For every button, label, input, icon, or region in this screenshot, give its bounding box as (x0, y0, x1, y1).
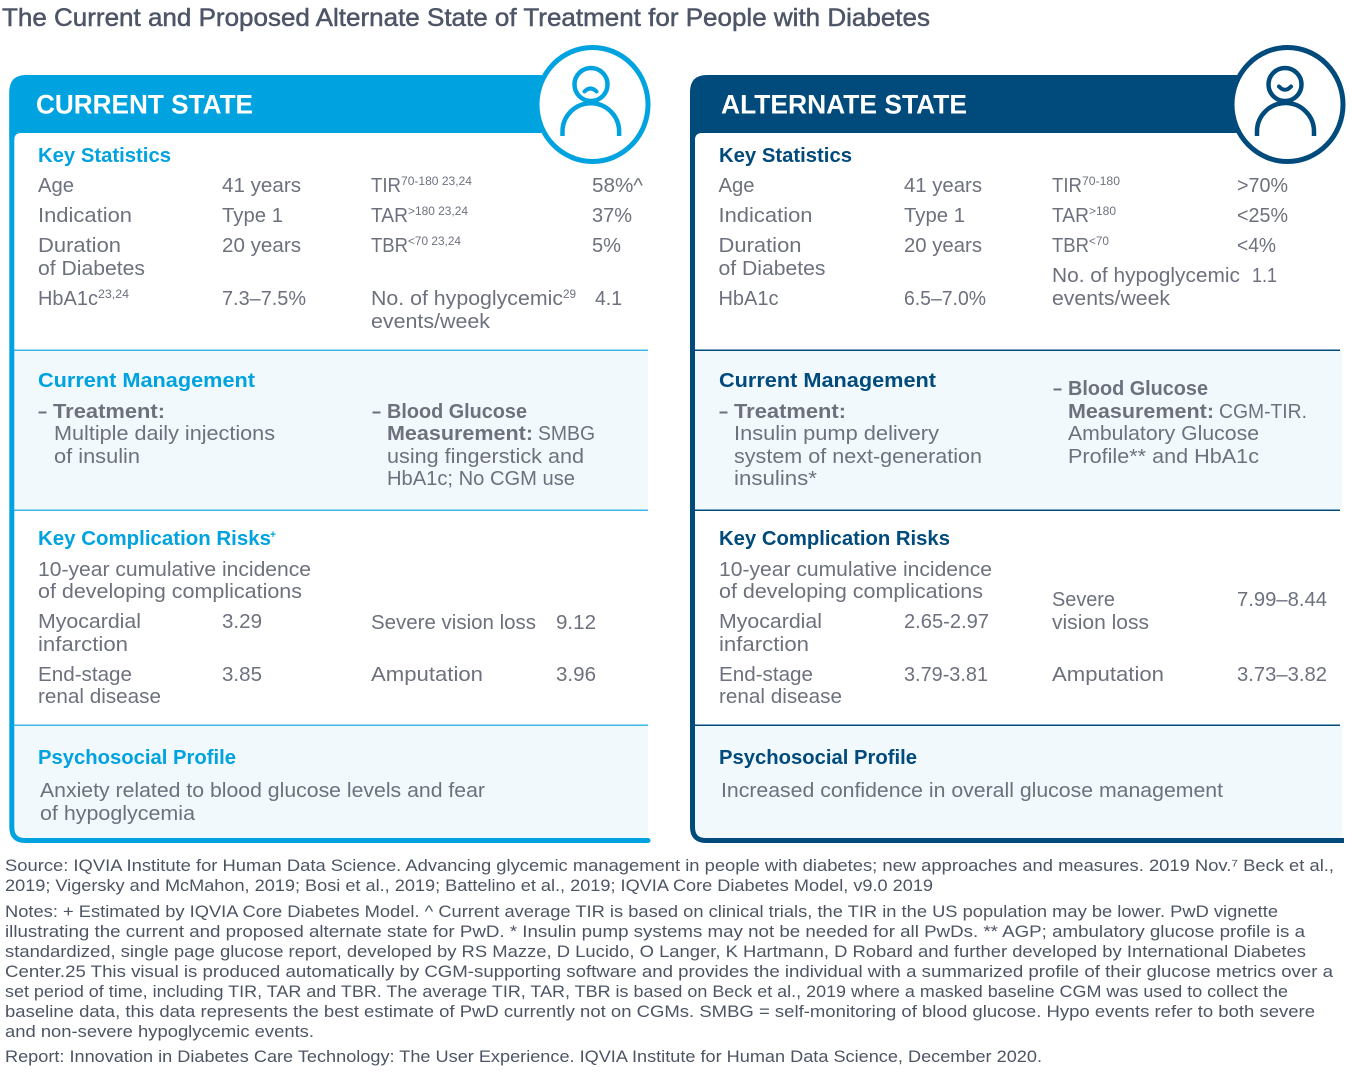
section: key complication risks: infarction (719, 633, 809, 656)
notes: baseline data, this data represents the best estimate of PwD currently not on CGMs. SMBG = self-monitoring of blood glucose. Hypo events refer to both severe (5, 1002, 1315, 1021)
section: key statistics: Type 1 (904, 204, 965, 227)
section: current management: Measurement: (387, 422, 533, 445)
section: key complication risks: renal disease (38, 685, 161, 708)
section: key complication risks: 3.85 (222, 663, 262, 686)
section: current management: of insulin (54, 445, 140, 468)
section: key statistics: of Diabetes (38, 257, 145, 280)
header: alternate state (690, 75, 1260, 140)
section: key complication risks: 9.12 (556, 611, 596, 634)
source note: 2019; Vigersky and McMahon, 2019; Bosi et al., 2019; Battelino et al., 2019; IQVIA Core Diabetes Model, v9.0 2019 (5, 876, 933, 895)
section: key complication risks: + (270, 529, 276, 541)
section: key complication risks: 3.79-3.81 (904, 663, 988, 686)
header: current state (9, 75, 570, 140)
section: key complication risks: renal disease (719, 685, 842, 708)
section: psychosocial profile: Psychosocial Profile (719, 746, 917, 769)
section: current management: using fingerstick and (387, 445, 584, 468)
section: key complication risks: Severe (1052, 588, 1115, 611)
section: current management: Blood Glucose (1068, 377, 1208, 400)
section: current management: system of next-generation (734, 445, 982, 468)
section: key statistics: <70 23,24 (408, 236, 462, 248)
section: key statistics: Duration (38, 234, 121, 257)
section: key complication risks: End-stage (719, 663, 813, 686)
section: current management: – (372, 400, 381, 423)
section: key statistics (718, 144, 1288, 310)
icon: sad person in circle (537, 48, 648, 162)
section: key complication risks: infarction (38, 633, 128, 656)
section: current management: Profile** and HbA1c (1068, 445, 1259, 468)
section: key statistics: TIR (371, 174, 401, 197)
section: key complication risks: 10-year cumulative incidence (719, 558, 992, 581)
section: key complication risks: Key Complication Risks (38, 527, 271, 550)
section: current management: Treatment: (734, 400, 846, 423)
section: current management: – (719, 400, 728, 423)
section: key complication risks: 10-year cumulative incidence (38, 558, 311, 581)
section: key statistics: TIR (1052, 174, 1082, 197)
header: current state: CURRENT STATE (36, 90, 253, 120)
section: psychosocial profile (38, 746, 485, 825)
section: key statistics: >180 23,24 (408, 206, 469, 218)
section: current management: SMBG (538, 422, 595, 445)
section: current management (719, 369, 1307, 490)
section: key complication risks: Key Complication Risks (719, 527, 950, 550)
section: current management: Current Management (719, 369, 936, 392)
section: current management: – (38, 400, 47, 423)
section: key statistics: 20 years (904, 234, 982, 257)
header: alternate state: ALTERNATE STATE (721, 90, 967, 120)
section: current management (38, 369, 595, 490)
section: current management: Insulin pump delivery (734, 422, 940, 445)
section: key statistics: 5% (592, 234, 621, 257)
notes: and non-severe hypoglycemic events. (5, 1022, 314, 1041)
panel: current state (9, 48, 648, 840)
section: psychosocial profile: of hypoglycemia (40, 802, 196, 825)
section: key statistics: events/week (1052, 287, 1171, 310)
section: psychosocial profile: Psychosocial Profile (38, 746, 236, 769)
section: key complication risks: Severe vision loss (371, 611, 536, 634)
source note: Source: IQVIA Institute for Human Data Science. Advancing glycemic management in people with diabetes; new approaches and measures. 2019 Nov.⁷ Beck et al., (5, 856, 1334, 875)
section: key complication risks: Myocardial (719, 610, 822, 633)
section: psychosocial profile: Increased confidence in overall glucose management (721, 779, 1223, 802)
section: key complication risks: Amputation (371, 663, 483, 686)
section: key statistics: 1.1 (1252, 264, 1277, 287)
section: key complication risks (38, 527, 596, 708)
section: key complication risks: 3.29 (222, 610, 262, 633)
section: key complication risks: vision loss (1052, 611, 1149, 634)
section: key statistics: HbA1c (38, 287, 98, 310)
section: current management: Treatment: (53, 400, 165, 423)
section: key statistics: Duration (718, 234, 802, 257)
section: key statistics: Age (38, 174, 74, 197)
section: key statistics: >180 (1089, 206, 1116, 218)
notes (5, 902, 1334, 1041)
source note (5, 856, 1334, 895)
section: key statistics: 20 years (222, 234, 301, 257)
section: key statistics: Key Statistics (719, 144, 852, 167)
section: key statistics: 23,24 (98, 289, 130, 301)
section: key statistics: 37% (592, 204, 632, 227)
section: key statistics: TAR (371, 204, 408, 227)
notes: illustrating the current and proposed alternate state for PwD. * Insulin pump systems may not be needed for all PwDs. ** AGP; ambulatory glucose profile is a (5, 922, 1306, 941)
section: key statistics: HbA1c (718, 287, 778, 310)
section: key statistics (38, 144, 643, 333)
section: current management: HbA1c; No CGM use (387, 467, 575, 490)
section: key statistics: Type 1 (222, 204, 283, 227)
section: key statistics: Key Statistics (38, 144, 171, 167)
section: current management: Current Management (38, 369, 255, 392)
section: key statistics: No. of hypoglycemic (1052, 264, 1240, 287)
section: current management: – (1053, 377, 1062, 400)
section: current management: CGM-TIR. (1219, 400, 1307, 423)
section: key complication risks: of developing complications (38, 580, 302, 603)
section: key statistics: No. of hypoglycemic (371, 287, 563, 310)
section: key statistics: TAR (1052, 204, 1089, 227)
section: key statistics: >70% (1237, 174, 1288, 197)
section: key statistics: 6.5–7.0% (904, 287, 986, 310)
section: current management: Blood Glucose (387, 400, 527, 423)
section: key complication risks: 7.99–8.44 (1237, 588, 1327, 611)
section: key complication risks: 3.73–3.82 (1237, 663, 1327, 686)
section: key statistics: 70-180 (1082, 176, 1120, 188)
section: key statistics: <70 (1089, 236, 1109, 248)
section: key complication risks (719, 527, 1327, 708)
section: key complication risks: 2.65-2.97 (904, 610, 989, 633)
section: key statistics: 70-180 23,24 (401, 176, 473, 188)
section: key statistics: 7.3–7.5% (222, 287, 306, 310)
notes: standardized, single page glucose report, developed by RS Mazze, D Lucido, O Langer, K Hartmann, D Robard and further developed by International Diabetes (5, 942, 1306, 961)
notes: set period of time, including TIR, TAR and TBR. The average TIR, TAR, TBR is based on Beck et al., 2019 where a masked baseline CGM was used to collect the (5, 982, 1288, 1001)
section: key statistics: 41 years (222, 174, 301, 197)
notes: Center.25 This visual is produced automatically by CGM-supporting software and provides the individual with a summarized profile of their glucose metrics over a (5, 962, 1334, 981)
section: key statistics: 29 (563, 289, 576, 301)
section: key complication risks: of developing complications (719, 580, 983, 603)
section: key statistics: <25% (1237, 204, 1288, 227)
section: key complication risks: 3.96 (556, 663, 596, 686)
section: key statistics: 41 years (904, 174, 982, 197)
section: key statistics: of Diabetes (718, 257, 826, 280)
section: key statistics: TBR (1052, 234, 1089, 257)
title: The Current and Proposed Alternate State of Treatment for People with Diabetes (2, 4, 930, 32)
section: key statistics: <4% (1237, 234, 1276, 257)
section: psychosocial profile: Anxiety related to blood glucose levels and fear (40, 779, 485, 802)
section: key statistics: events/week (371, 310, 491, 333)
section: key complication risks: Amputation (1052, 663, 1164, 686)
section: current management: insulins* (734, 467, 817, 490)
section: psychosocial profile (719, 746, 1223, 802)
report citation: Report: Innovation in Diabetes Care Technology: The User Experience. IQVIA Institute for Human Data Science, December 2020. (5, 1047, 1042, 1066)
section: key statistics: TBR (371, 234, 408, 257)
section: current management: Multiple daily injections (54, 422, 275, 445)
section: key complication risks: End-stage (38, 663, 132, 686)
section: key statistics: 58%^ (592, 174, 643, 197)
section: key statistics: 4.1 (595, 287, 622, 310)
panel: alternate state (690, 48, 1344, 840)
section: current management: Ambulatory Glucose (1068, 422, 1259, 445)
section: key statistics: Indication (38, 204, 132, 227)
icon: happy person in circle (1232, 48, 1343, 162)
section: current management: Measurement: (1068, 400, 1214, 423)
section: key statistics: Indication (718, 204, 812, 227)
section: key complication risks: Myocardial (38, 610, 141, 633)
section: key statistics: Age (718, 174, 754, 197)
notes: Notes: + Estimated by IQVIA Core Diabetes Model. ^ Current average TIR is based on clinical trials, the TIR in the US population may be lower. PwD vignette (5, 902, 1278, 921)
